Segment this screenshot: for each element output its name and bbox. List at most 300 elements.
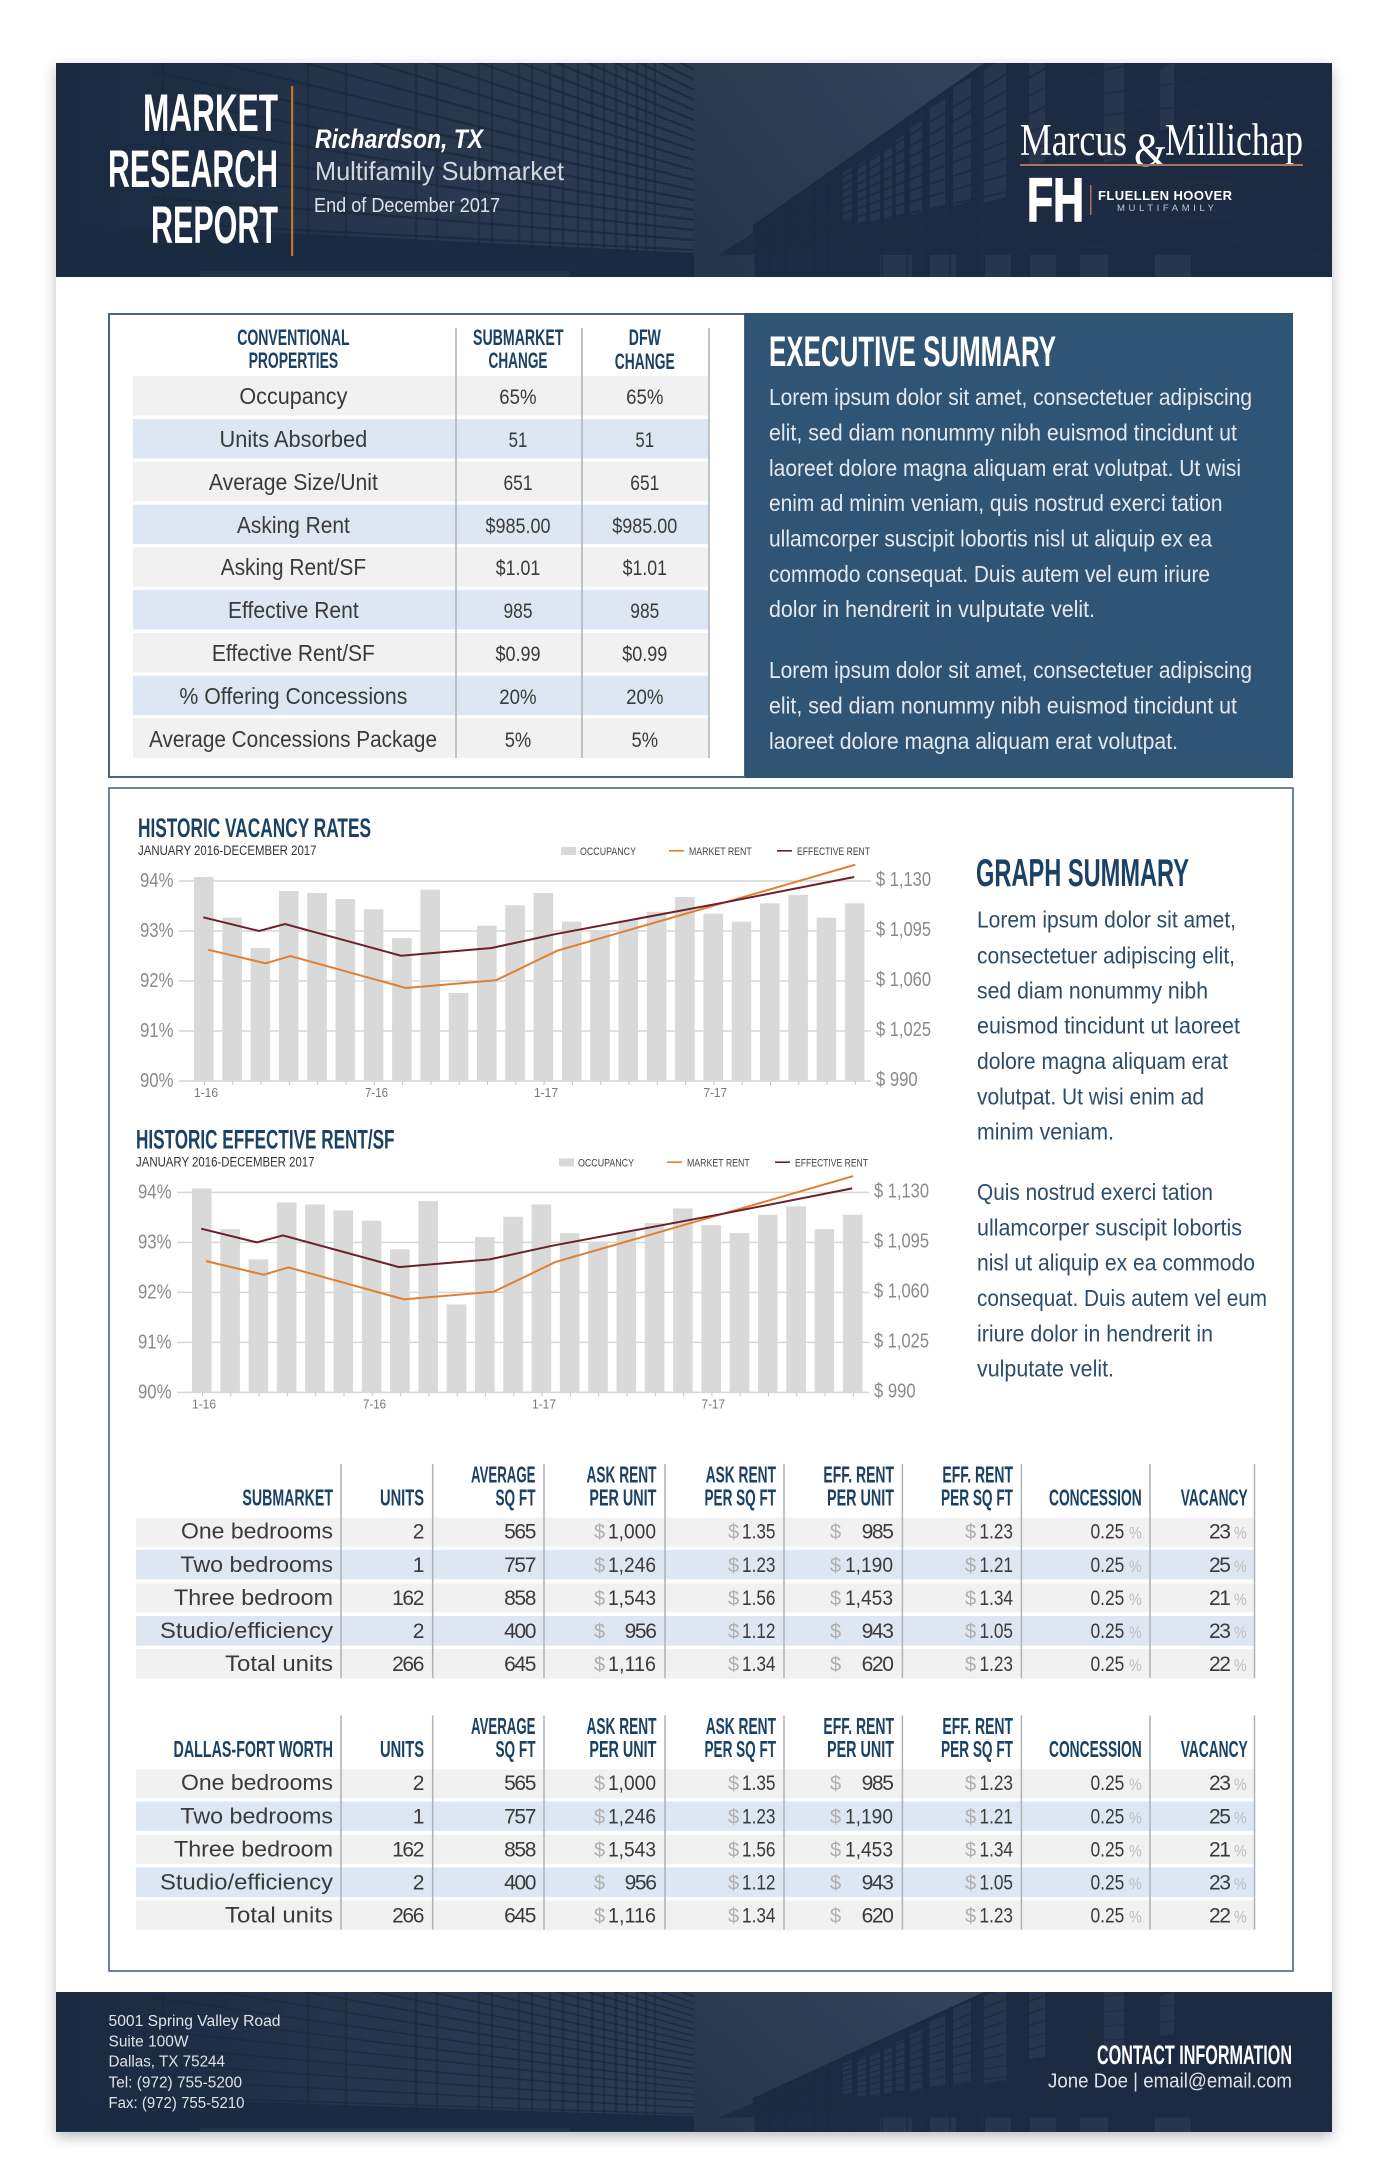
- row: total units: 0.25: [1090, 1653, 1124, 1676]
- address block: 5001 Spring Valley Road: [108, 2013, 280, 2030]
- table header: ASK RENT: [586, 1462, 656, 1488]
- row: total units: $: [728, 1906, 739, 1928]
- row: studio efficiency: 2: [413, 1872, 424, 1894]
- row: total units: $: [830, 1906, 841, 1928]
- row: units absorbed: Units Absorbed: [220, 426, 367, 452]
- table header: PER UNIT: [589, 1736, 656, 1762]
- table header: CONVENTIONAL: [237, 325, 350, 350]
- row: two bedrooms: $: [728, 1555, 739, 1577]
- row: one bedrooms: 565: [504, 1772, 536, 1795]
- row: studio efficiency: 1.12: [742, 1620, 776, 1643]
- left axis labels: 94%: [140, 870, 174, 892]
- chart heading: JANUARY 2016-DECEMBER 2017: [136, 1154, 314, 1169]
- row: two bedrooms: $: [830, 1555, 841, 1577]
- left axis labels: 90%: [140, 1070, 174, 1092]
- header banner: [56, 63, 1332, 277]
- row: one bedrooms: 1,000: [608, 1520, 656, 1543]
- text: graph paragraph two: ullamcorper suscipit lobortis: [977, 1214, 1242, 1240]
- row: offering concessions: 20%: [499, 686, 537, 709]
- table header: PROPERTIES: [249, 348, 338, 373]
- logo: Fluellen Hoover: [1027, 166, 1233, 234]
- text: summary paragraph two: Lorem ipsum dolor sit amet, consectetuer adipiscing: [769, 657, 1252, 683]
- row: asking rent: $985.00: [612, 515, 677, 538]
- row: total units: $: [594, 1906, 605, 1928]
- row: two bedrooms: $: [728, 1806, 739, 1828]
- table header: SQ FT: [496, 1485, 536, 1511]
- table header: PER SQ FT: [704, 1736, 776, 1762]
- table header: UNITS: [380, 1736, 424, 1762]
- row: studio efficiency: %: [1129, 1623, 1142, 1642]
- row: effective rent: Effective Rent: [228, 597, 359, 623]
- table header: SUBMARKET: [242, 1485, 333, 1511]
- row: one bedrooms: 2: [413, 1520, 424, 1543]
- row: studio efficiency: 956: [625, 1620, 656, 1643]
- row: two bedrooms: $: [965, 1806, 976, 1828]
- occupancy bars: [192, 1188, 862, 1392]
- row: two bedrooms: $: [594, 1806, 605, 1828]
- row: two bedrooms: 1,246: [608, 1554, 656, 1577]
- row: total units: 266: [392, 1653, 424, 1676]
- row: offering concessions: % Offering Concessions: [179, 683, 407, 709]
- row: total units: %: [1129, 1656, 1142, 1675]
- row: studio efficiency: 1.05: [980, 1872, 1013, 1894]
- table header: CHANGE: [615, 349, 675, 374]
- row: studio efficiency: 400: [504, 1620, 536, 1643]
- legend: EFFECTIVE RENT: [797, 846, 870, 858]
- row: three bedroom: $: [728, 1588, 739, 1610]
- row: studio efficiency: 943: [862, 1872, 893, 1894]
- text: graph paragraph two: nisl ut aliquip ex ea commodo: [977, 1250, 1255, 1276]
- logo: Marcus and Millichap: Millichap: [1165, 115, 1303, 165]
- row: three bedroom: 1.34: [980, 1838, 1013, 1862]
- row: studio efficiency: $: [728, 1872, 739, 1894]
- occupancy bars: [194, 877, 864, 1081]
- row: two bedrooms: 1.21: [980, 1806, 1013, 1828]
- row: three bedroom: 1.56: [742, 1838, 776, 1862]
- title divider: [291, 86, 293, 256]
- row: one bedrooms: 565: [504, 1520, 536, 1543]
- row: three bedroom: 1,543: [608, 1838, 656, 1862]
- left axis labels: 94%: [138, 1181, 172, 1203]
- row: units absorbed: [133, 419, 709, 458]
- table header: [174, 1713, 1248, 1762]
- row: asking rent per sf: $1.01: [496, 557, 540, 580]
- table header: PER SQ FT: [704, 1485, 776, 1511]
- text: summary paragraph one: enim ad minim veniam, quis nostrud exerci tation: [769, 490, 1222, 516]
- table header: VACANCY: [1181, 1485, 1248, 1511]
- effective rent line: [201, 1188, 852, 1267]
- address block: [108, 2013, 280, 2112]
- x axis labels: 1-17: [534, 1085, 558, 1100]
- left axis labels: 91%: [140, 1020, 174, 1042]
- row: studio efficiency: 23: [1209, 1872, 1230, 1894]
- row: three bedroom: %: [1129, 1590, 1142, 1609]
- row: total units: 620: [862, 1653, 893, 1676]
- row: three bedroom: 0.25: [1090, 1838, 1124, 1862]
- address block: Fax: (972) 755-5210: [108, 2095, 245, 2112]
- x axis labels: 1-16: [192, 1396, 216, 1411]
- row: occupancy: [133, 376, 709, 416]
- row: total units: %: [1234, 1656, 1247, 1675]
- text: graph paragraph two: vulputate velit.: [977, 1356, 1114, 1382]
- row: two bedrooms: 1: [413, 1554, 424, 1577]
- row: studio efficiency: $: [830, 1872, 841, 1894]
- text: graph paragraph one: minim veniam.: [977, 1119, 1114, 1145]
- report title: [108, 84, 278, 255]
- row: one bedrooms: %: [1234, 1523, 1247, 1542]
- row: two bedrooms: $: [965, 1555, 976, 1577]
- footer banner: [56, 1992, 1332, 2132]
- row: three bedroom: $: [965, 1588, 976, 1610]
- row: studio efficiency: 943: [862, 1620, 893, 1643]
- text: graph paragraph one: [977, 907, 1241, 1145]
- row: three bedroom: $: [594, 1840, 605, 1862]
- right axis labels: $ 1,130: [876, 869, 931, 891]
- table header: AVERAGE: [471, 1462, 536, 1488]
- row: studio efficiency: $: [594, 1872, 605, 1894]
- table header: UNITS: [380, 1485, 424, 1511]
- row: studio efficiency: Studio/efficiency: [160, 1618, 333, 1643]
- text: summary paragraph one: elit, sed diam nonummy nibh euismod tincidunt ut: [769, 420, 1238, 446]
- row: total units: 22: [1209, 1904, 1230, 1928]
- row: two bedrooms: 1,246: [608, 1806, 656, 1828]
- row: offering concessions: 20%: [626, 686, 663, 709]
- text: summary paragraph two: laoreet dolore magna aliquam erat volutpat.: [769, 728, 1178, 754]
- x axis labels: 1-17: [532, 1396, 556, 1411]
- left axis labels: 92%: [140, 970, 174, 992]
- text: graph paragraph two: [977, 1179, 1267, 1382]
- market rent line: [206, 1176, 853, 1299]
- market rent line: [208, 865, 855, 988]
- table header: AVERAGE: [471, 1713, 536, 1739]
- table header: DALLAS-FORT WORTH: [174, 1736, 333, 1762]
- row: total units: 645: [504, 1653, 536, 1676]
- graph summary: [976, 852, 1267, 1382]
- heading: executive summary: EXECUTIVE SUMMARY: [769, 328, 1056, 376]
- row: average concessions package: [133, 718, 709, 758]
- row: studio efficiency: $: [830, 1621, 841, 1643]
- right axis labels: $ 990: [874, 1380, 916, 1402]
- row: studio efficiency: 400: [504, 1872, 536, 1894]
- row: effective rent per sf: [133, 633, 709, 672]
- row: three bedroom: [136, 1835, 1254, 1864]
- row: three bedroom: 0.25: [1090, 1587, 1124, 1610]
- chart heading: [138, 813, 371, 858]
- address block: Dallas, TX 75244: [108, 2054, 225, 2071]
- row: two bedrooms: Two bedrooms: [180, 1804, 333, 1828]
- row: one bedrooms: $: [728, 1773, 739, 1795]
- row: units absorbed: 51: [635, 429, 654, 452]
- row: three bedroom: 162: [392, 1587, 424, 1610]
- right axis labels: [874, 1180, 929, 1402]
- table header: CONCESSION: [1049, 1736, 1142, 1762]
- row: studio efficiency: 956: [625, 1872, 656, 1894]
- row: two bedrooms: [136, 1802, 1254, 1831]
- location block: [314, 124, 565, 217]
- row: three bedroom: 1,453: [845, 1587, 893, 1610]
- row: three bedroom: 858: [504, 1838, 536, 1862]
- table header: EFF. RENT: [823, 1713, 894, 1739]
- chart heading: HISTORIC EFFECTIVE RENT/SF: [136, 1124, 394, 1154]
- row: average size: Average Size/Unit: [209, 469, 378, 495]
- logo: Fluellen Hoover: MULTIFAMILY: [1117, 203, 1215, 214]
- logo: Fluellen Hoover: FH: [1027, 166, 1084, 234]
- row: one bedrooms: 23: [1209, 1520, 1230, 1543]
- text: graph paragraph two: consequat. Duis autem vel eum: [977, 1285, 1267, 1311]
- row: total units: 1,116: [608, 1904, 656, 1928]
- row: total units: [136, 1649, 1254, 1679]
- row: effective rent per sf: $0.99: [622, 643, 667, 666]
- text: graph paragraph one: sed diam nonummy nibh: [977, 977, 1208, 1003]
- right axis labels: [876, 869, 931, 1091]
- row: one bedrooms: 985: [862, 1520, 893, 1543]
- row: total units: %: [1129, 1908, 1142, 1926]
- row: effective rent per sf: $0.99: [496, 643, 540, 666]
- row: two bedrooms: 1,190: [845, 1554, 893, 1577]
- row: one bedrooms: $: [965, 1773, 976, 1795]
- row: one bedrooms: 23: [1209, 1772, 1230, 1795]
- contact information: Jone Doe | email@email.com: [1048, 2070, 1292, 2092]
- legend: OCCUPANCY: [578, 1157, 635, 1169]
- text: summary paragraph one: commodo consequat. Duis autem vel eum iriure: [769, 561, 1210, 587]
- row: effective rent: [133, 590, 709, 630]
- text: summary paragraph one: Lorem ipsum dolor sit amet, consectetuer adipiscing: [769, 384, 1252, 410]
- row: two bedrooms: [136, 1550, 1254, 1579]
- right axis labels: $ 1,095: [874, 1230, 929, 1252]
- table header: VACANCY: [1181, 1736, 1248, 1762]
- logo: Fluellen Hoover: FLUELLEN HOOVER: [1098, 188, 1233, 203]
- row: effective rent: 985: [630, 600, 659, 623]
- row: studio efficiency: 1.12: [742, 1872, 776, 1894]
- row: three bedroom: $: [965, 1840, 976, 1862]
- row: two bedrooms: Two bedrooms: [180, 1552, 333, 1577]
- right axis labels: $ 1,060: [874, 1280, 929, 1302]
- text: graph paragraph one: Lorem ipsum dolor sit amet,: [977, 907, 1236, 933]
- row: three bedroom: %: [1129, 1842, 1142, 1860]
- address block: Suite 100W: [108, 2034, 189, 2051]
- text: graph paragraph one: consectetuer adipiscing elit,: [977, 942, 1235, 968]
- row: studio efficiency: [136, 1868, 1254, 1897]
- row: studio efficiency: 0.25: [1090, 1872, 1124, 1894]
- row: one bedrooms: $: [728, 1521, 739, 1543]
- row: occupancy: 65%: [499, 386, 537, 409]
- row: one bedrooms: 0.25: [1090, 1772, 1124, 1795]
- report title: REPORT: [151, 196, 278, 255]
- location block: End of December 2017: [314, 195, 500, 217]
- right axis labels: $ 990: [876, 1069, 918, 1091]
- text: summary paragraph two: elit, sed diam nonummy nibh euismod tincidunt ut: [769, 692, 1238, 718]
- row: studio efficiency: Studio/efficiency: [160, 1870, 333, 1894]
- row: two bedrooms: 1.23: [742, 1554, 776, 1577]
- table header: ASK RENT: [706, 1713, 776, 1739]
- x axis labels: 1-16: [194, 1085, 218, 1100]
- row: two bedrooms: 757: [504, 1554, 536, 1577]
- row: studio efficiency: $: [594, 1621, 605, 1643]
- row: three bedroom: 21: [1209, 1587, 1230, 1610]
- row: average size: [133, 462, 709, 501]
- text: graph paragraph two: Quis nostrud exerci tation: [977, 1179, 1213, 1205]
- row: total units: $: [594, 1654, 605, 1676]
- legend: EFFECTIVE RENT: [795, 1157, 868, 1169]
- text: summary paragraph one: [769, 384, 1252, 622]
- table header: ASK RENT: [586, 1713, 656, 1739]
- logo: Marcus and Millichap: [1020, 115, 1303, 177]
- address block: Tel: (972) 755-5200: [108, 2074, 242, 2091]
- left axis labels: 90%: [138, 1381, 172, 1403]
- row: effective rent: 985: [504, 600, 532, 623]
- row: one bedrooms: 985: [862, 1772, 893, 1795]
- row: average concessions package: 5%: [505, 729, 531, 752]
- row: one bedrooms: One bedrooms: [181, 1518, 333, 1543]
- x axis labels: 7-16: [363, 1396, 386, 1411]
- legend: MARKET RENT: [687, 1157, 750, 1169]
- row: occupancy: 65%: [626, 386, 663, 409]
- row: total units: $: [965, 1906, 976, 1928]
- row: asking rent: $985.00: [486, 515, 550, 538]
- table header: [242, 1462, 1248, 1511]
- x axis labels: [194, 1085, 727, 1100]
- row: studio efficiency: %: [1129, 1874, 1142, 1894]
- row: total units: 266: [392, 1904, 424, 1928]
- row: occupancy: Occupancy: [239, 383, 348, 409]
- row: two bedrooms: %: [1129, 1557, 1142, 1576]
- left axis labels: [138, 1181, 172, 1403]
- row: total units: $: [728, 1654, 739, 1676]
- table header: DFW: [629, 325, 661, 350]
- row: studio efficiency: %: [1234, 1874, 1247, 1894]
- row: average size: 651: [630, 472, 659, 495]
- row: total units: $: [830, 1654, 841, 1676]
- row: total units: 1.23: [980, 1904, 1013, 1928]
- row: total units: Total units: [225, 1902, 333, 1928]
- row: total units: 22: [1209, 1653, 1230, 1676]
- left axis labels: 93%: [138, 1231, 172, 1253]
- row: one bedrooms: %: [1129, 1523, 1142, 1542]
- row: three bedroom: 1.34: [980, 1587, 1013, 1610]
- table header: PER UNIT: [827, 1485, 894, 1511]
- text: summary paragraph one: ullamcorper suscipit lobortis nisl ut aliquip ex ea: [769, 526, 1212, 552]
- row: three bedroom: %: [1234, 1590, 1247, 1609]
- row: effective rent per sf: Effective Rent/SF: [212, 640, 375, 666]
- report title: RESEARCH: [108, 140, 278, 199]
- row: studio efficiency: 1.05: [980, 1620, 1013, 1643]
- row: one bedrooms: 1.23: [980, 1520, 1013, 1543]
- text: graph paragraph one: dolore magna aliquam erat: [977, 1048, 1229, 1074]
- legend: [561, 846, 870, 858]
- property comparison table: [133, 325, 709, 758]
- right axis labels: $ 1,060: [876, 969, 931, 991]
- text: graph paragraph one: euismod tincidunt ut laoreet: [977, 1012, 1241, 1038]
- table header: CHANGE: [488, 348, 548, 373]
- row: total units: 1.34: [742, 1904, 776, 1928]
- x axis labels: 7-17: [702, 1396, 725, 1411]
- row: two bedrooms: %: [1234, 1557, 1247, 1576]
- row: one bedrooms: 1,000: [608, 1772, 656, 1795]
- row: one bedrooms: $: [830, 1521, 841, 1543]
- chart heading: [136, 1124, 394, 1169]
- panel: property table box: [109, 314, 745, 777]
- table header: EFF. RENT: [823, 1462, 894, 1488]
- row: one bedrooms: 1.35: [742, 1772, 776, 1795]
- contact information: [1048, 2040, 1292, 2092]
- row: three bedroom: $: [830, 1588, 841, 1610]
- report title: MARKET: [143, 84, 278, 143]
- row: three bedroom: 162: [392, 1838, 424, 1862]
- right axis labels: $ 1,025: [874, 1330, 929, 1352]
- row: three bedroom: 21: [1209, 1838, 1230, 1862]
- row: total units: 620: [862, 1904, 893, 1928]
- chart: historic effective rent per sf: [136, 1124, 929, 1411]
- x axis labels: 7-17: [704, 1085, 727, 1100]
- row: two bedrooms: %: [1234, 1808, 1247, 1828]
- row: two bedrooms: 1,190: [845, 1806, 893, 1828]
- panel: graphs and tables box: [109, 788, 1293, 1971]
- text: summary paragraph one: laoreet dolore magna aliquam erat volutpat. Ut wisi: [769, 455, 1241, 481]
- table header: EFF. RENT: [942, 1462, 1013, 1488]
- effective rent line: [203, 877, 854, 956]
- table header: PER UNIT: [589, 1485, 656, 1511]
- row: total units: $: [965, 1654, 976, 1676]
- chart: historic vacancy rates: [138, 813, 931, 1100]
- row: three bedroom: $: [728, 1840, 739, 1862]
- row: asking rent: [133, 505, 709, 544]
- table header: PER SQ FT: [941, 1736, 1013, 1762]
- legend: MARKET RENT: [689, 846, 752, 858]
- row: studio efficiency: %: [1234, 1623, 1247, 1642]
- row: two bedrooms: 0.25: [1090, 1806, 1124, 1828]
- row: two bedrooms: 25: [1209, 1806, 1230, 1828]
- panel: executive summary: [745, 313, 1293, 778]
- row: studio efficiency: $: [965, 1872, 976, 1894]
- table header: SQ FT: [496, 1736, 536, 1762]
- text: summary paragraph one: dolor in hendrerit in vulputate velit.: [769, 596, 1095, 622]
- row: units absorbed: 51: [509, 429, 527, 452]
- row: one bedrooms: $: [830, 1773, 841, 1795]
- table: dallas-fort worth units: [136, 1713, 1254, 1930]
- row: one bedrooms: 1.23: [980, 1772, 1013, 1795]
- row: one bedrooms: [136, 1769, 1254, 1798]
- row: studio efficiency: 0.25: [1090, 1620, 1124, 1643]
- table header: PER SQ FT: [941, 1485, 1013, 1511]
- row: total units: Total units: [225, 1651, 333, 1676]
- row: asking rent: Asking Rent: [237, 512, 350, 538]
- row: one bedrooms: $: [594, 1773, 605, 1795]
- row: three bedroom: $: [594, 1588, 605, 1610]
- row: three bedroom: $: [830, 1840, 841, 1862]
- row: three bedroom: Three bedroom: [174, 1836, 333, 1862]
- logo: Marcus and Millichap: Marcus: [1020, 115, 1127, 165]
- row: average concessions package: 5%: [632, 729, 658, 752]
- text: graph paragraph one: volutpat. Ut wisi enim ad: [977, 1083, 1204, 1109]
- row: two bedrooms: 1: [413, 1806, 424, 1828]
- row: one bedrooms: 1.35: [742, 1520, 776, 1543]
- row: three bedroom: 858: [504, 1587, 536, 1610]
- left axis labels: [140, 870, 174, 1092]
- row: two bedrooms: 757: [504, 1806, 536, 1828]
- right axis labels: $ 1,095: [876, 919, 931, 941]
- row: three bedroom: %: [1234, 1842, 1247, 1860]
- left axis labels: 91%: [138, 1331, 172, 1353]
- row: three bedroom: 1,453: [845, 1838, 893, 1862]
- table header: SUBMARKET: [473, 325, 564, 350]
- table header: CONCESSION: [1049, 1485, 1142, 1511]
- row: total units: %: [1234, 1908, 1247, 1926]
- row: average size: 651: [504, 472, 532, 495]
- heading: graph summary: GRAPH SUMMARY: [976, 852, 1189, 895]
- row: one bedrooms: [136, 1518, 1254, 1547]
- row: total units: 1.23: [980, 1653, 1013, 1676]
- text: graph paragraph two: iriure dolor in hendrerit in: [977, 1320, 1213, 1346]
